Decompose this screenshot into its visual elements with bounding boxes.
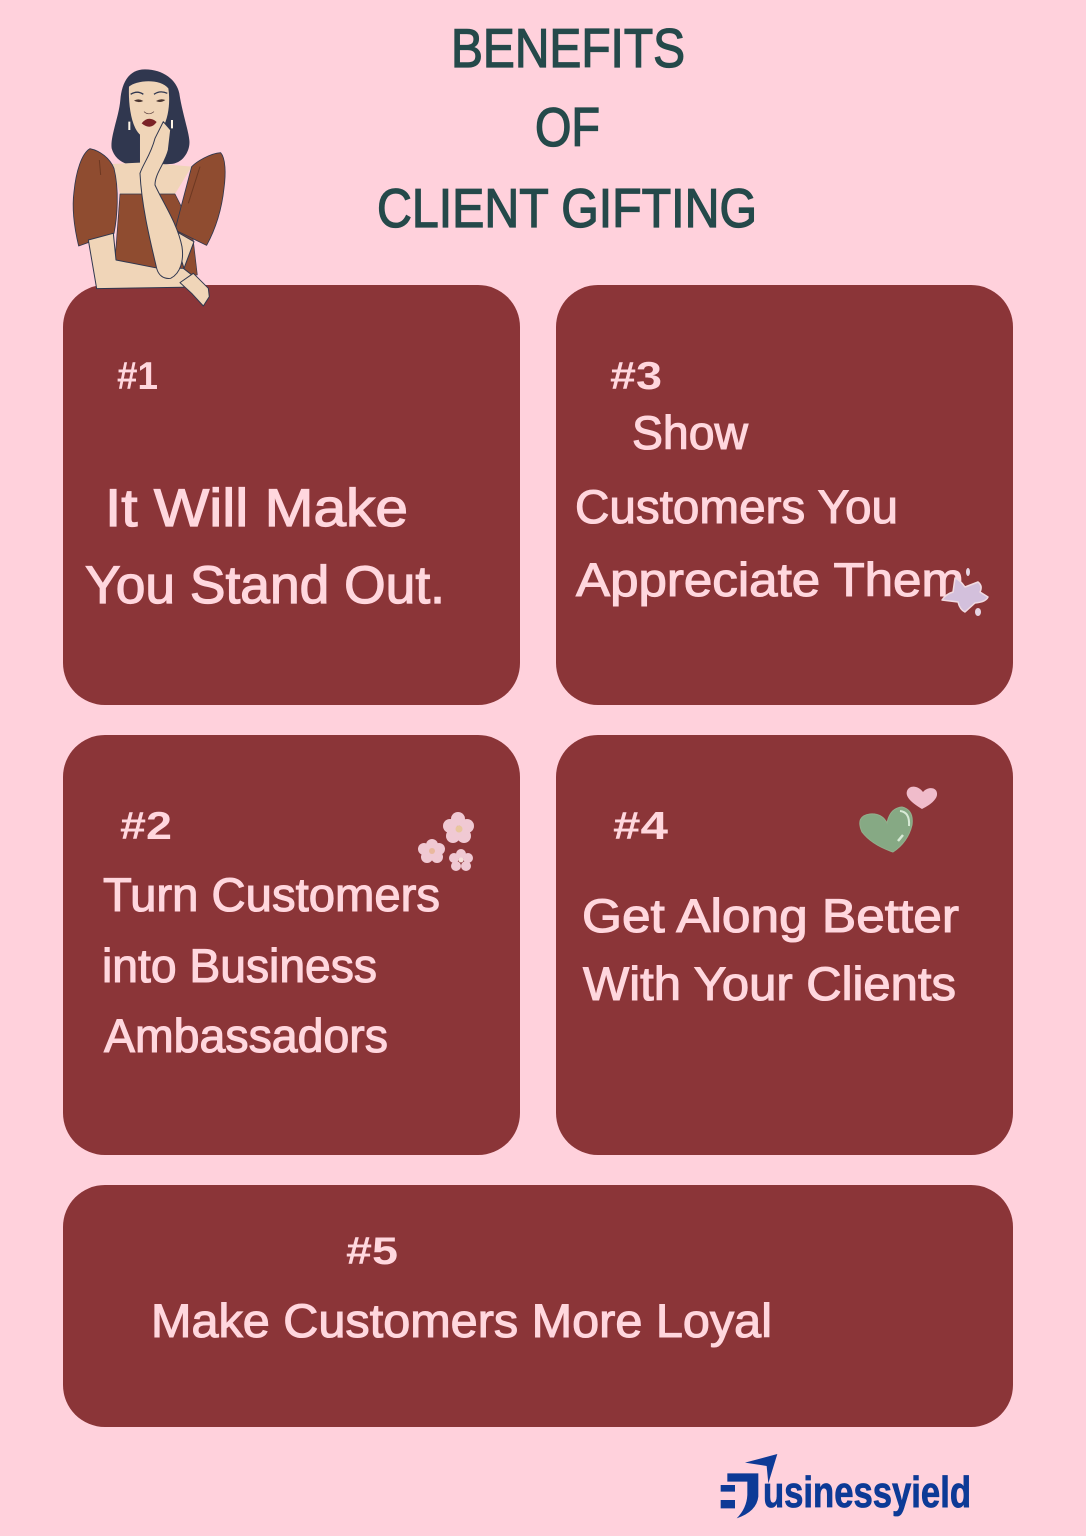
panel: #2 ambassadors: #2	[120, 805, 172, 848]
panel: #4 get along: Get Along Better	[582, 889, 959, 942]
right sleeve	[175, 153, 225, 245]
eyes and brows	[131, 92, 167, 94]
left sleeve	[73, 149, 117, 246]
panel: #3 appreciate: Appreciate Them	[576, 553, 964, 606]
panel: #1 stand out: #1	[117, 355, 158, 398]
panel: #4 get along: With Your Clients	[583, 957, 956, 1010]
title: BENEFITS	[451, 17, 685, 79]
panel: #4 get along: #4	[613, 805, 668, 848]
title: CLIENT GIFTING	[377, 177, 757, 239]
panel: #3 appreciate: Customers You	[575, 480, 898, 533]
panel: #2 ambassadors	[63, 735, 520, 1155]
arrow	[745, 1454, 777, 1483]
panel: #3 appreciate	[556, 285, 1013, 705]
hair	[111, 69, 189, 166]
logo: Businessyield	[721, 1454, 971, 1518]
panel: #2 ambassadors: Ambassadors	[104, 1009, 388, 1062]
face	[129, 81, 169, 138]
panel: #5 loyal	[63, 1185, 1013, 1427]
panel: #1 stand out	[63, 285, 520, 705]
right upper arm	[175, 231, 194, 268]
B blocks	[721, 1485, 735, 1508]
panel: #4 get along	[556, 735, 1013, 1155]
icon: hearts	[860, 787, 937, 852]
sleeve folds	[99, 160, 200, 203]
panel: #2 ambassadors: into Business	[102, 939, 377, 992]
panel: #3 appreciate: #3	[610, 355, 662, 398]
bodice	[115, 194, 197, 277]
illustration: woman	[73, 69, 225, 306]
panel: #3 appreciate: Show	[632, 406, 749, 459]
panel: #1 stand out: It Will Make	[105, 479, 408, 538]
forearm and hand	[140, 122, 183, 278]
upper arm	[88, 233, 198, 289]
icon: flowers	[418, 812, 474, 871]
lips	[142, 119, 157, 127]
earrings	[129, 120, 172, 130]
panel: #5 loyal: #5	[346, 1230, 398, 1273]
B hook	[727, 1473, 758, 1518]
panel: #2 ambassadors: Turn Customers	[103, 868, 440, 921]
panel: #5 loyal: Make Customers More Loyal	[151, 1294, 772, 1347]
title: OF	[535, 96, 600, 158]
nose	[144, 112, 154, 114]
lower hand	[180, 273, 209, 306]
icon: lilac splat	[942, 568, 988, 616]
neck and chest	[112, 132, 192, 194]
title	[377, 17, 757, 239]
panel: #1 stand out: You Stand Out.	[85, 556, 445, 615]
logo: Businessyield: usinessyield	[763, 1468, 971, 1517]
